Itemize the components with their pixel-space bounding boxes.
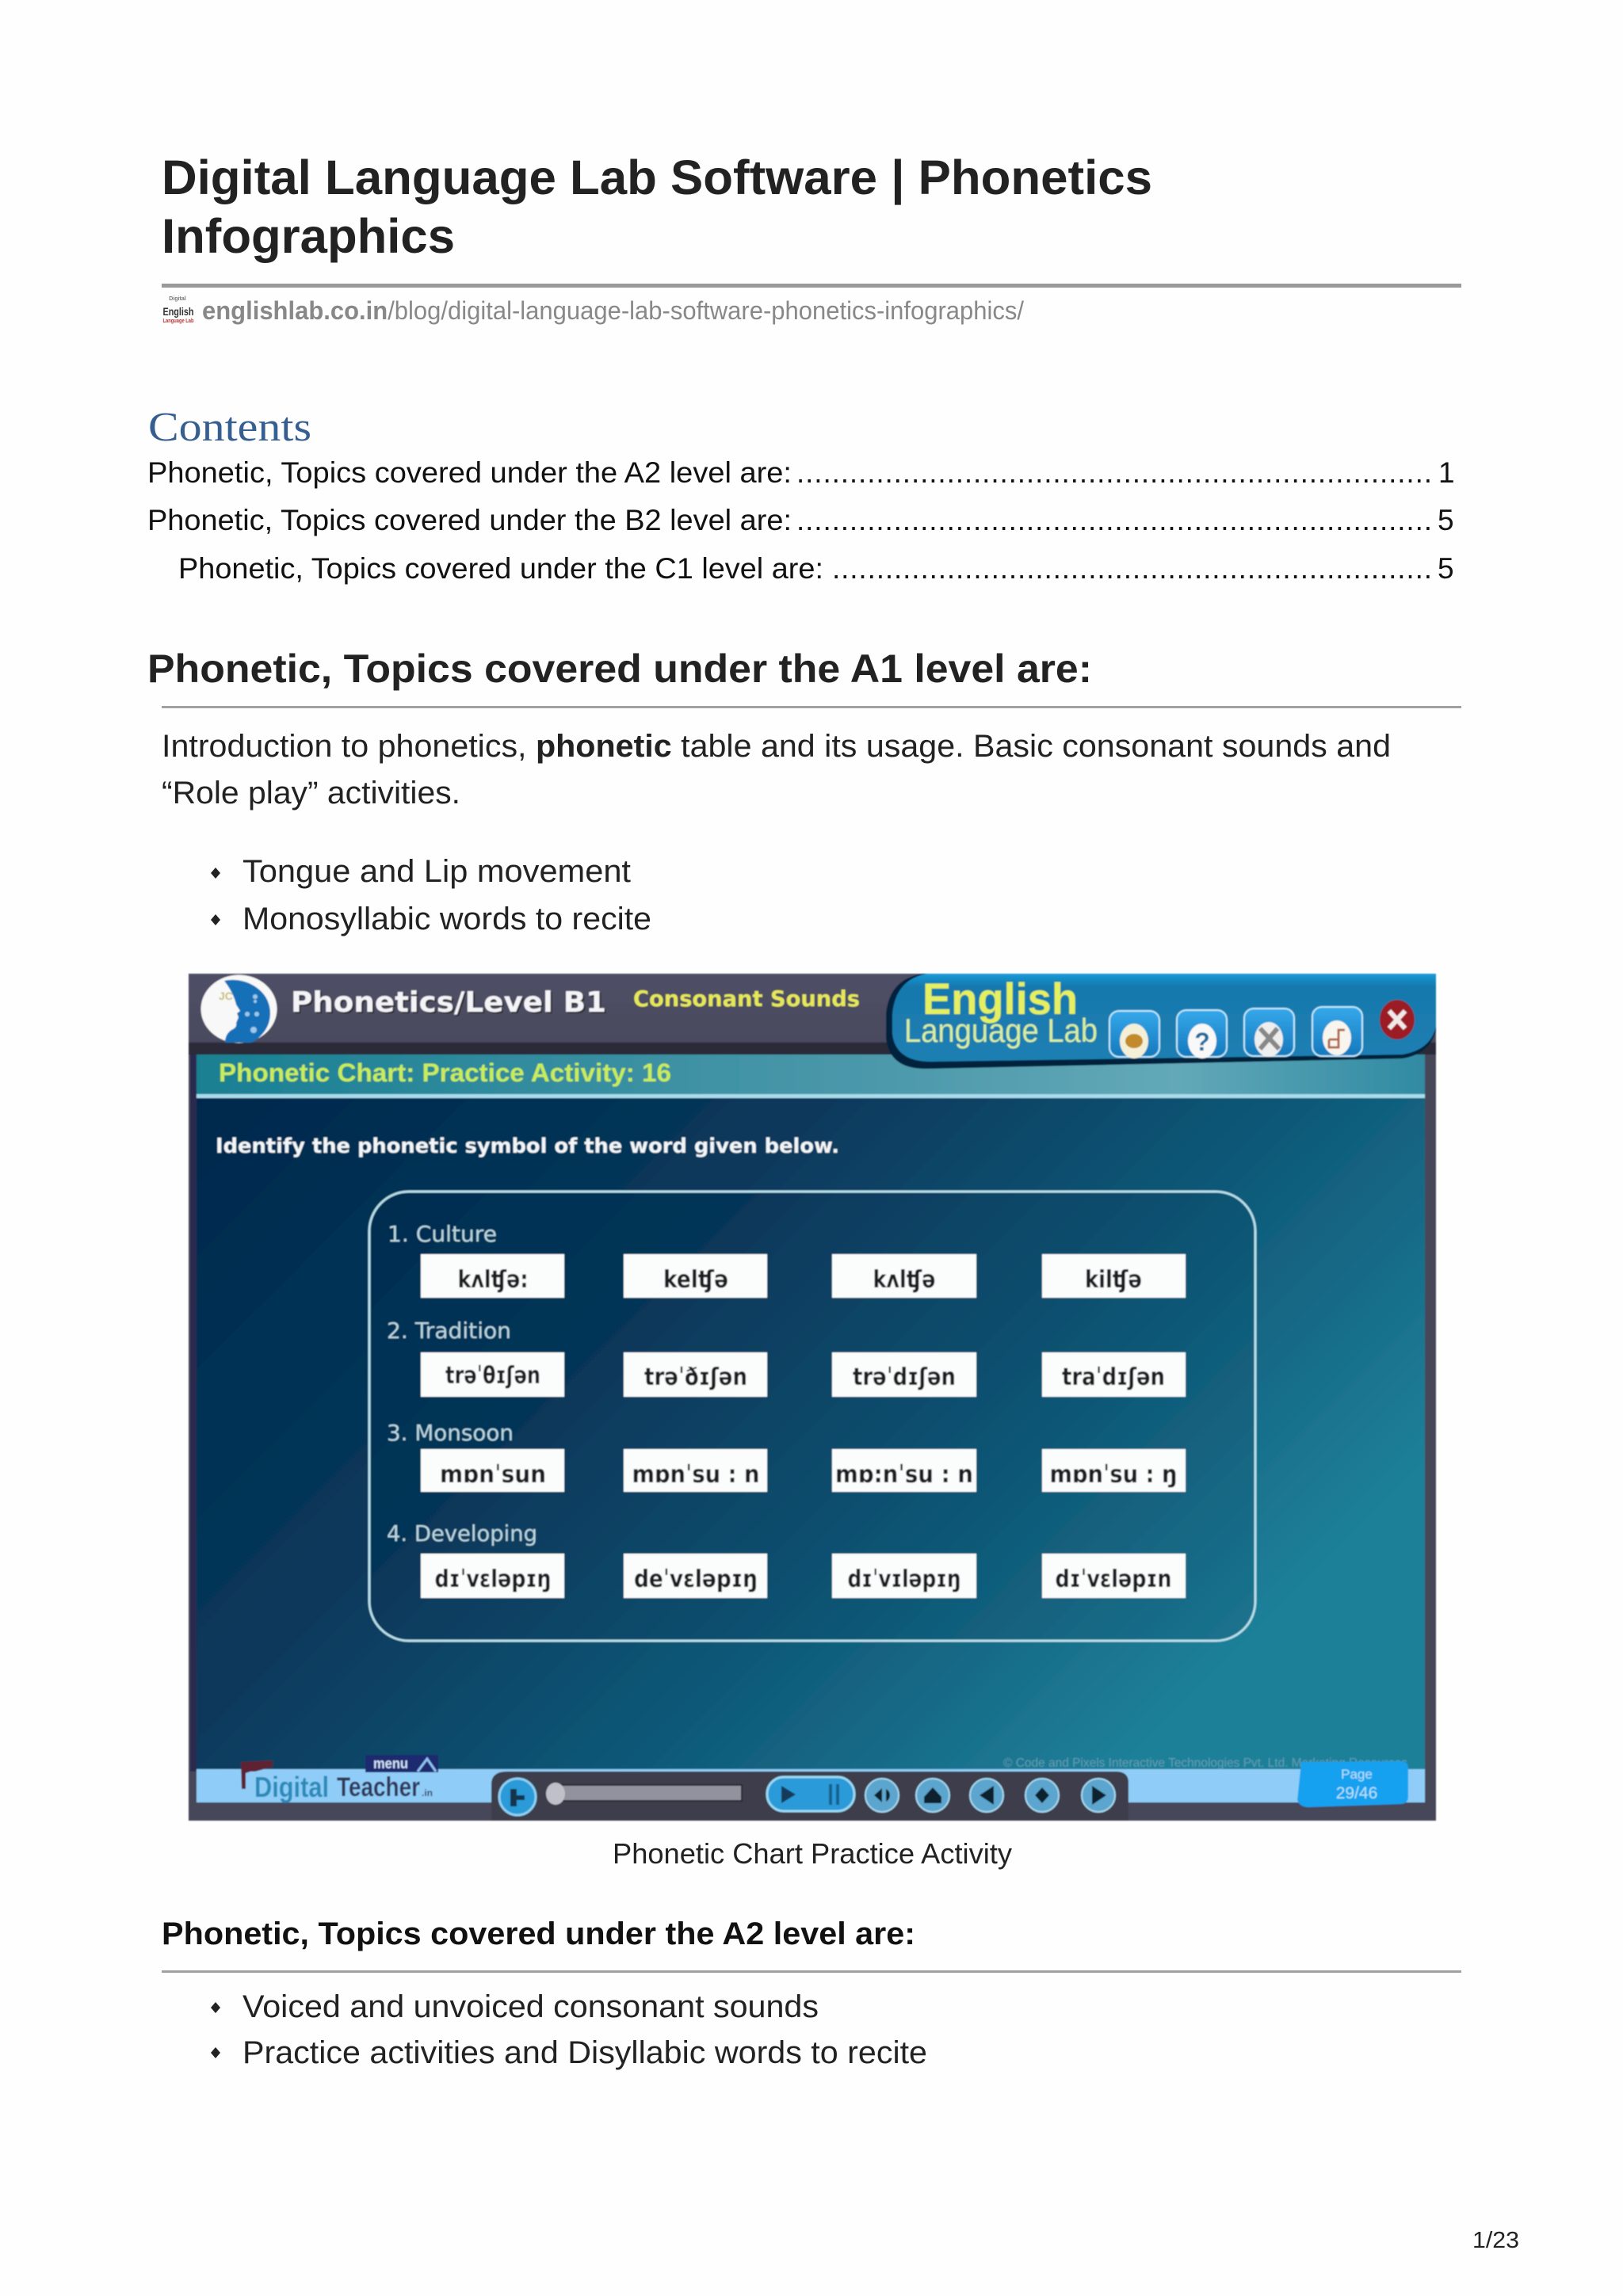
icon: site favicon: Digital (169, 296, 186, 302)
question 3: mɒnˈsun (440, 1461, 546, 1489)
copyright: © Code and Pixels Interactive Technologies Pvt. Ltd. Marketing Resources (1003, 1756, 1407, 1770)
brand panel (886, 974, 1436, 1069)
question 2: 2. Tradition (387, 1318, 511, 1344)
bullet list A1: Tongue and Lip movement (242, 854, 631, 889)
icon: site favicon: Language Lab (163, 318, 193, 324)
table of contents: Phonetic, Topics covered under the B2 level are: (147, 504, 792, 536)
question 3: mɒ:nˈsu : n (835, 1461, 973, 1489)
title: Infographics (162, 209, 455, 263)
table of contents: Phonetic, Topics covered under the A2 level are: (147, 456, 792, 489)
play pause button (767, 1777, 854, 1811)
image caption: Phonetic Chart Practice Activity (613, 1837, 1012, 1870)
digital teacher logo: Teacher (337, 1772, 420, 1802)
intro paragraph (162, 729, 1391, 810)
page indicator: 29/46 (1336, 1784, 1377, 1802)
question 4: dɪˈvɛləpɪŋ (434, 1566, 552, 1593)
question 1: kʌlʧə: (458, 1266, 528, 1294)
source url: englishlab.co.in/blog/digital-language-lab-software-phonetics-infographics/ (202, 296, 1024, 325)
question 2: trəˈθɪʃən (445, 1362, 540, 1390)
contents heading: Contents (148, 405, 311, 450)
title: Digital Language Lab Software | Phonetics (162, 151, 1152, 206)
section heading A2: Phonetic, Topics covered under the A2 level are: (162, 1917, 915, 1951)
screenshot left edge (190, 1055, 197, 1772)
question 1: kʌlʧə (873, 1266, 935, 1294)
question 2: trəˈðɪʃən (644, 1363, 747, 1391)
bullet list A1 (211, 854, 651, 936)
brand panel: Language Lab (904, 1012, 1098, 1049)
question 2: trəˈdɪʃən (853, 1363, 956, 1391)
screenshot: phonetic chart practice activity: Phonetics/Level B1 (291, 986, 606, 1019)
question 4: 4. Developing (387, 1520, 537, 1547)
icon: head logo: JC (219, 990, 233, 1002)
activity title band: Phonetic Chart: Practice Activity: 16 (219, 1058, 671, 1087)
intro paragraph: “Role play” activities. (162, 776, 460, 810)
table of contents (147, 456, 1455, 585)
table of contents: ........................................................................ (796, 504, 1432, 536)
digital teacher logo (241, 1760, 433, 1803)
toolbar buttons (1109, 1007, 1362, 1058)
bullet list A2: Practice activities and Disyllabic words to recite (242, 2035, 927, 2070)
title (162, 151, 1152, 263)
digital teacher logo: .in (422, 1787, 433, 1798)
question 4 (387, 1520, 1186, 1598)
question 3: mɒnˈsu : n (632, 1461, 759, 1489)
question 4: dɪˈvɪləpɪŋ (848, 1566, 960, 1593)
menu icon button (499, 1779, 536, 1815)
toolbar buttons: ? (1194, 1028, 1210, 1056)
progress slider (546, 1783, 742, 1805)
question 1: 1. Culture (388, 1221, 497, 1247)
bullet list A2 (211, 1989, 927, 2070)
table of contents: Phonetic, Topics covered under the C1 level are: (178, 552, 823, 585)
section heading A1: Phonetic, Topics covered under the A1 level are: (147, 646, 1092, 691)
digital teacher logo: Digital (254, 1771, 329, 1803)
question 3: mɒnˈsu : ŋ (1049, 1461, 1178, 1489)
icon: head logo (201, 974, 277, 1043)
question 4: dɪˈvɛləpɪn (1056, 1566, 1171, 1593)
icon: site favicon: English (163, 305, 193, 318)
table of contents: ........................................................................ (796, 456, 1432, 489)
table of contents: 5 (1438, 504, 1454, 536)
page indicator: Page (1341, 1767, 1373, 1782)
table of contents: 1 (1438, 456, 1455, 489)
question 2: traˈdɪʃən (1062, 1363, 1165, 1391)
intro paragraph: Introduction to phonetics, phonetic table and its usage. Basic consonant sounds and (162, 729, 1391, 764)
page number: 1/23 (1472, 2228, 1519, 2253)
menu tab: menu (373, 1756, 408, 1772)
question 2 (387, 1318, 1186, 1397)
menu tab (365, 1755, 438, 1772)
bullet list A1: Monosyllabic words to recite (242, 902, 651, 936)
question 4: deˈvɛləpɪŋ (634, 1566, 758, 1593)
page indicator (1297, 1761, 1408, 1807)
icon: close button (1380, 1000, 1415, 1039)
activity title band (197, 1055, 1425, 1098)
footer band (197, 1769, 1425, 1802)
playback bar (491, 1772, 1128, 1821)
question 1: kelʧə (663, 1266, 728, 1294)
question 3 (387, 1420, 1186, 1492)
playback icon buttons (865, 1779, 1115, 1812)
screenshot main area (197, 1098, 1425, 1772)
screen subheading: Consonant Sounds (633, 986, 860, 1012)
table of contents: 5 (1438, 552, 1454, 585)
screenshot: phonetic chart practice activity (189, 974, 1436, 1821)
top bar (189, 974, 1436, 1055)
question 3: 3. Monsoon (387, 1420, 514, 1446)
table of contents: .................................................................... (832, 552, 1432, 585)
brand panel: English (922, 974, 1078, 1024)
screenshot frame (189, 974, 1436, 1821)
screen heading: Phonetics/Level B1 (292, 988, 608, 1020)
question panel (369, 1192, 1255, 1641)
instruction: Identify the phonetic symbol of the word given below. (216, 1135, 839, 1158)
icon: site favicon (163, 296, 193, 324)
bullet list A2: Voiced and unvoiced consonant sounds (242, 1989, 819, 2024)
question 1: kilʧə (1085, 1266, 1142, 1294)
question 1 (388, 1221, 1186, 1298)
